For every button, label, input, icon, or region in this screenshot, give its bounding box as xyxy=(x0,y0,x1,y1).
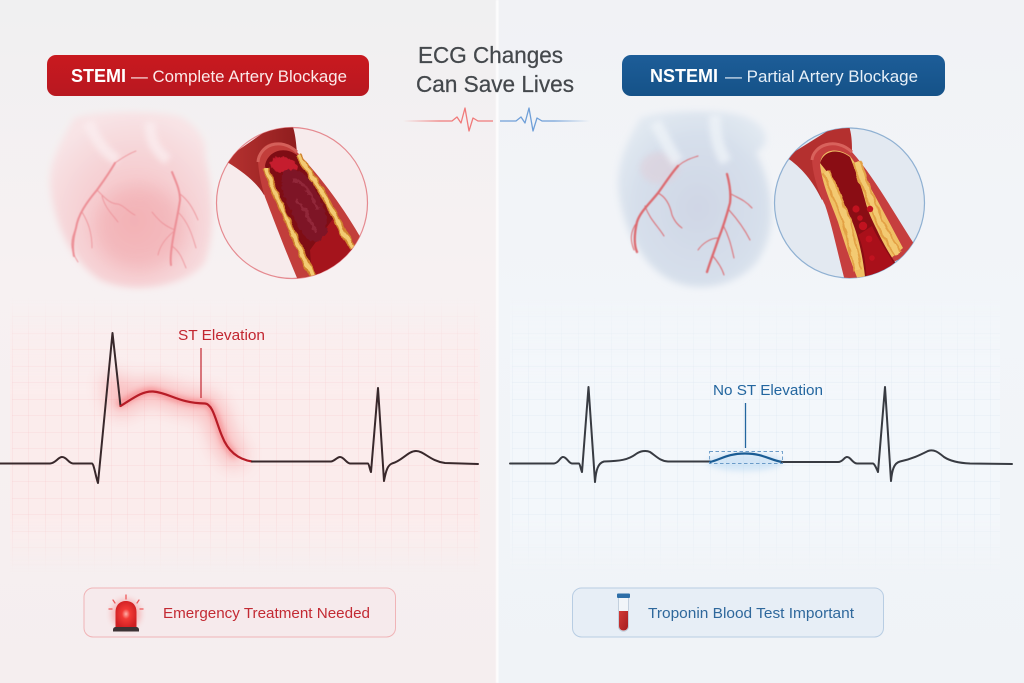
illustration: NSTEMI artery with partial plaque xyxy=(774,122,924,287)
illustration: NSTEMI heart xyxy=(618,111,772,287)
icon: blood test tube xyxy=(617,594,630,631)
heading: NSTEMI banner: NSTEMI xyxy=(650,66,718,86)
heading: NSTEMI banner xyxy=(622,55,945,96)
chart: STEMI ECG trace with ST elevation xyxy=(0,333,478,483)
heading: NSTEMI banner: — Partial Artery Blockage xyxy=(725,67,918,86)
annotation: ST Elevation: ST Elevation xyxy=(178,328,265,344)
chart: NSTEMI ECG trace xyxy=(510,387,1012,482)
annotation: No ST Elevation: No ST Elevation xyxy=(713,383,823,399)
title: Can Save Lives xyxy=(416,71,574,97)
annotation: ST Elevation xyxy=(178,328,265,398)
background: right panel xyxy=(497,0,1024,683)
title: ECG Changes xyxy=(418,42,563,68)
background: left panel xyxy=(0,0,497,683)
chart: STEMI ECG grid xyxy=(12,316,478,552)
annotation: No ST Elevation xyxy=(710,383,823,464)
illustration: STEMI artery with clot xyxy=(216,120,368,285)
label: emergency text: Emergency Treatment Needed xyxy=(163,606,370,622)
callout: Troponin Blood Test Important xyxy=(572,588,884,637)
label: troponin text: Troponin Blood Test Important xyxy=(648,606,854,622)
heading: STEMI banner: STEMI xyxy=(71,66,126,86)
illustration: STEMI heart xyxy=(50,112,212,288)
icon: red siren xyxy=(109,595,143,632)
title xyxy=(416,42,574,97)
icon: title ECG sparkline red and blue xyxy=(403,108,590,131)
callout: Emergency Treatment Needed xyxy=(84,588,396,637)
heading: STEMI banner xyxy=(47,55,369,96)
chart: NSTEMI ECG grid xyxy=(512,333,1000,548)
heading: STEMI banner: — Complete Artery Blockage xyxy=(131,67,347,86)
